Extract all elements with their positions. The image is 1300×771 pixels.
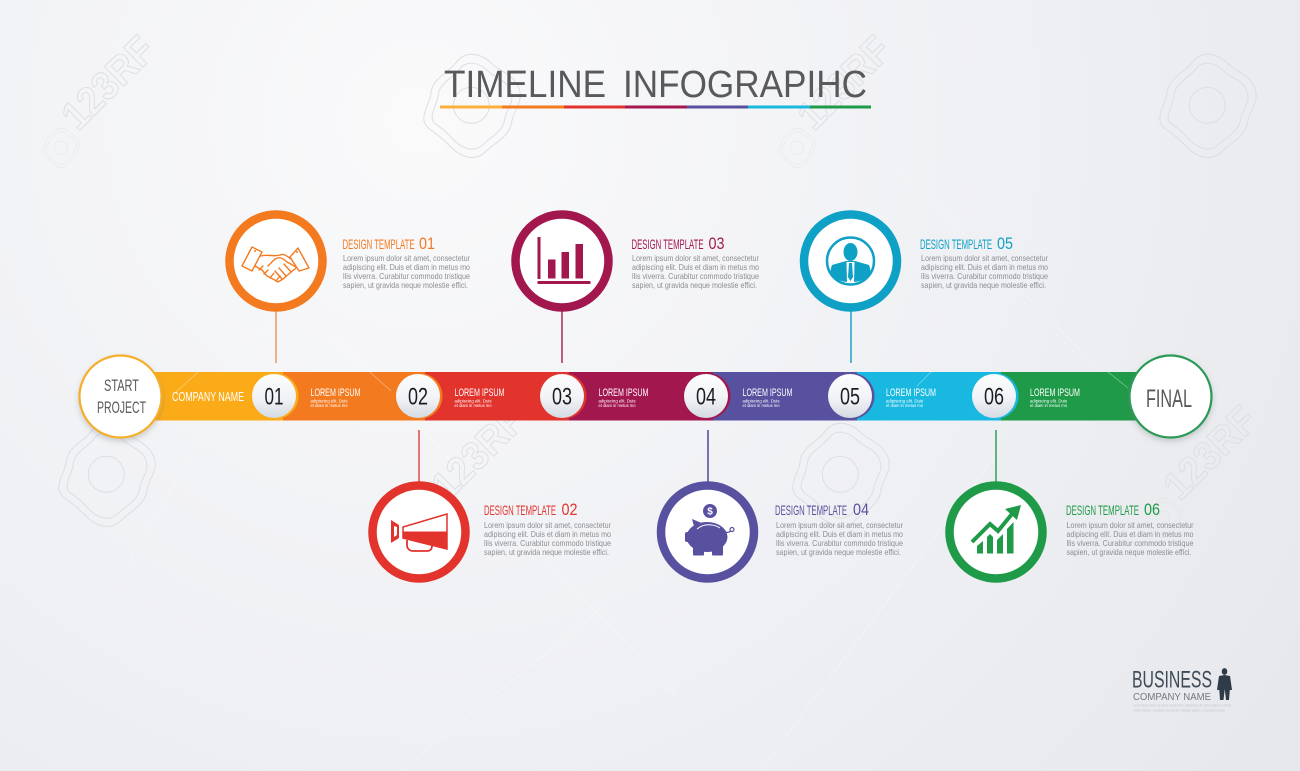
text block 01: sapien, ut gravida neque molestie effici. xyxy=(343,280,468,290)
business logo: mollis viverra. Curabitur commodo tristique sapien, ut gravida neque xyxy=(1133,708,1225,712)
step 05 marker xyxy=(828,373,874,419)
text block 05: sapien, ut gravida neque molestie effici. xyxy=(921,280,1046,290)
background watermark pattern: 123RF xyxy=(789,28,900,138)
text block 02: 02 xyxy=(562,500,578,519)
bar label 05: et diam in metus mo xyxy=(886,403,924,408)
text block 01: Lorem ipsum dolor sit amet, consectetur xyxy=(343,253,470,263)
company name label: COMPANY NAME xyxy=(172,390,244,404)
bar label 06: adipiscing elit. Duis xyxy=(1030,398,1067,404)
text block 03: sapien, ut gravida neque molestie effici. xyxy=(632,280,757,290)
step 03 marker xyxy=(540,373,586,419)
text block 03: 03 xyxy=(708,234,724,253)
title underline xyxy=(440,106,871,108)
step 01 marker: 01 xyxy=(264,384,284,410)
step 01 marker xyxy=(252,373,298,419)
text block 05: Lorem ipsum dolor sit amet, consectetur xyxy=(921,253,1048,263)
bar label 02: et diam in metus mo xyxy=(454,403,492,408)
timeline bar xyxy=(150,372,1146,420)
text block 04: DESIGN TEMPLATE xyxy=(775,502,847,518)
final circle xyxy=(1130,356,1212,438)
text block 02: sapien, ut gravida neque molestie effici. xyxy=(484,547,609,557)
text block 03 xyxy=(632,234,759,290)
icon: piggy bank xyxy=(661,486,754,578)
text block 06: DESIGN TEMPLATE xyxy=(1066,502,1139,518)
text block 01 xyxy=(342,234,470,290)
step 04 marker xyxy=(684,373,730,419)
text block 03: DESIGN TEMPLATE xyxy=(632,236,704,252)
bar overlay lines xyxy=(175,372,1128,393)
start circle: START xyxy=(104,376,139,395)
text block 06 xyxy=(1066,500,1194,557)
icon: businessman xyxy=(804,214,897,308)
bar label 02: LOREM IPSUM xyxy=(454,387,504,399)
background watermark pattern: 123RF xyxy=(1155,398,1266,508)
bar label 01: et diam in metus mo xyxy=(310,403,348,408)
bar label 05: LOREM IPSUM xyxy=(886,387,936,399)
text block 06: Lorem ipsum dolor sit amet, consectetur xyxy=(1066,520,1194,530)
bar label 06 xyxy=(1030,387,1080,408)
text block 05: adipiscing elit. Duis et diam in metus mo xyxy=(921,262,1048,272)
title xyxy=(444,64,867,106)
bar label 04: adipiscing elit. Duis xyxy=(742,398,780,404)
bar label 04: LOREM IPSUM xyxy=(742,387,792,399)
bar label 03: LOREM IPSUM xyxy=(598,387,648,399)
bar label 03 xyxy=(598,387,648,408)
text block 04: 04 xyxy=(853,500,869,519)
bar label 01: LOREM IPSUM xyxy=(310,387,360,399)
text block 04: Lorem ipsum dolor sit amet, consectetur xyxy=(776,520,903,530)
icon: megaphone xyxy=(372,486,466,578)
icon: piggy bank: $ xyxy=(707,506,713,518)
connector lines xyxy=(276,310,996,482)
bar label 01 xyxy=(310,387,360,408)
bar label 02 xyxy=(454,387,504,408)
business logo: COMPANY NAME xyxy=(1133,691,1211,703)
start circle xyxy=(80,356,162,438)
text block 02 xyxy=(484,500,611,557)
step 03 marker: 03 xyxy=(552,384,572,410)
text block 04: llis viverra. Curabitur commodo tristique xyxy=(776,538,903,548)
bar label 03: et diam in metus mo xyxy=(598,403,636,408)
text block 02: llis viverra. Curabitur commodo tristique xyxy=(484,538,611,548)
text block 01: DESIGN TEMPLATE xyxy=(342,236,414,252)
text block 04 xyxy=(775,500,903,557)
text block 04: adipiscing elit. Duis et diam in metus mo xyxy=(776,529,903,539)
text block 05: DESIGN TEMPLATE xyxy=(920,236,992,252)
text block 03: adipiscing elit. Duis et diam in metus mo xyxy=(632,262,759,272)
step 05 marker: 05 xyxy=(840,384,860,410)
bar label 01: adipiscing elit. Duis xyxy=(310,398,348,404)
step 04 marker: 04 xyxy=(696,384,716,410)
text block 02: Lorem ipsum dolor sit amet, consectetur xyxy=(484,520,611,530)
bar label 05: adipiscing elit. Duis xyxy=(886,398,923,404)
business logo: BUSINESS xyxy=(1132,666,1212,694)
final circle: FINAL xyxy=(1146,385,1192,413)
text block 04: sapien, ut gravida neque molestie effici. xyxy=(776,547,901,557)
business logo xyxy=(1132,666,1232,712)
text block 05 xyxy=(920,234,1048,290)
bar label 05 xyxy=(886,387,936,408)
bar label 06: LOREM IPSUM xyxy=(1030,387,1080,399)
icon: handshake xyxy=(230,214,322,308)
text block 06: llis viverra. Curabitur commodo tristique xyxy=(1066,538,1194,548)
bar label 04 xyxy=(742,387,792,408)
icon: growth chart xyxy=(950,486,1042,578)
background watermark pattern: 123RF xyxy=(53,28,164,138)
step 06 marker xyxy=(972,373,1018,419)
text block 03: Lorem ipsum dolor sit amet, consectetur xyxy=(632,253,759,263)
text block 05: llis viverra. Curabitur commodo tristique xyxy=(921,271,1048,281)
business logo: Lorem ipsum dolor sit amet, consectetur adipiscing elit. Duis et diam in metus xyxy=(1133,704,1231,708)
text block 01: llis viverra. Curabitur commodo tristique xyxy=(343,271,470,281)
bar label 06: et diam in metus mo xyxy=(1030,403,1068,408)
text block 01: 01 xyxy=(419,234,435,253)
text block 01: adipiscing elit. Duis et diam in metus mo xyxy=(343,262,470,272)
step 06 marker: 06 xyxy=(984,384,1004,410)
icon: bar chart xyxy=(516,214,608,308)
text block 03: llis viverra. Curabitur commodo tristique xyxy=(632,271,759,281)
bar label 03: adipiscing elit. Duis xyxy=(598,398,636,404)
text block 02: DESIGN TEMPLATE xyxy=(484,502,556,518)
text block 06: sapien, ut gravida neque molestie effici. xyxy=(1066,547,1192,557)
bar label 02: adipiscing elit. Duis xyxy=(454,398,492,404)
title: TIMELINE xyxy=(444,64,606,106)
background watermark pattern: 123RF xyxy=(423,398,534,508)
text block 06: adipiscing elit. Duis et diam in metus mo xyxy=(1066,529,1194,539)
text block 02: adipiscing elit. Duis et diam in metus mo xyxy=(484,529,611,539)
text block 06: 06 xyxy=(1144,500,1160,519)
icon: business figure xyxy=(1217,668,1232,700)
text block 05: 05 xyxy=(997,234,1013,253)
step 02 marker xyxy=(396,373,442,419)
start circle: PROJECT xyxy=(97,398,146,417)
title: INFOGRAPIHC xyxy=(623,64,867,106)
bar label 04: et diam in metus mo xyxy=(742,403,780,408)
step 02 marker: 02 xyxy=(408,384,428,410)
